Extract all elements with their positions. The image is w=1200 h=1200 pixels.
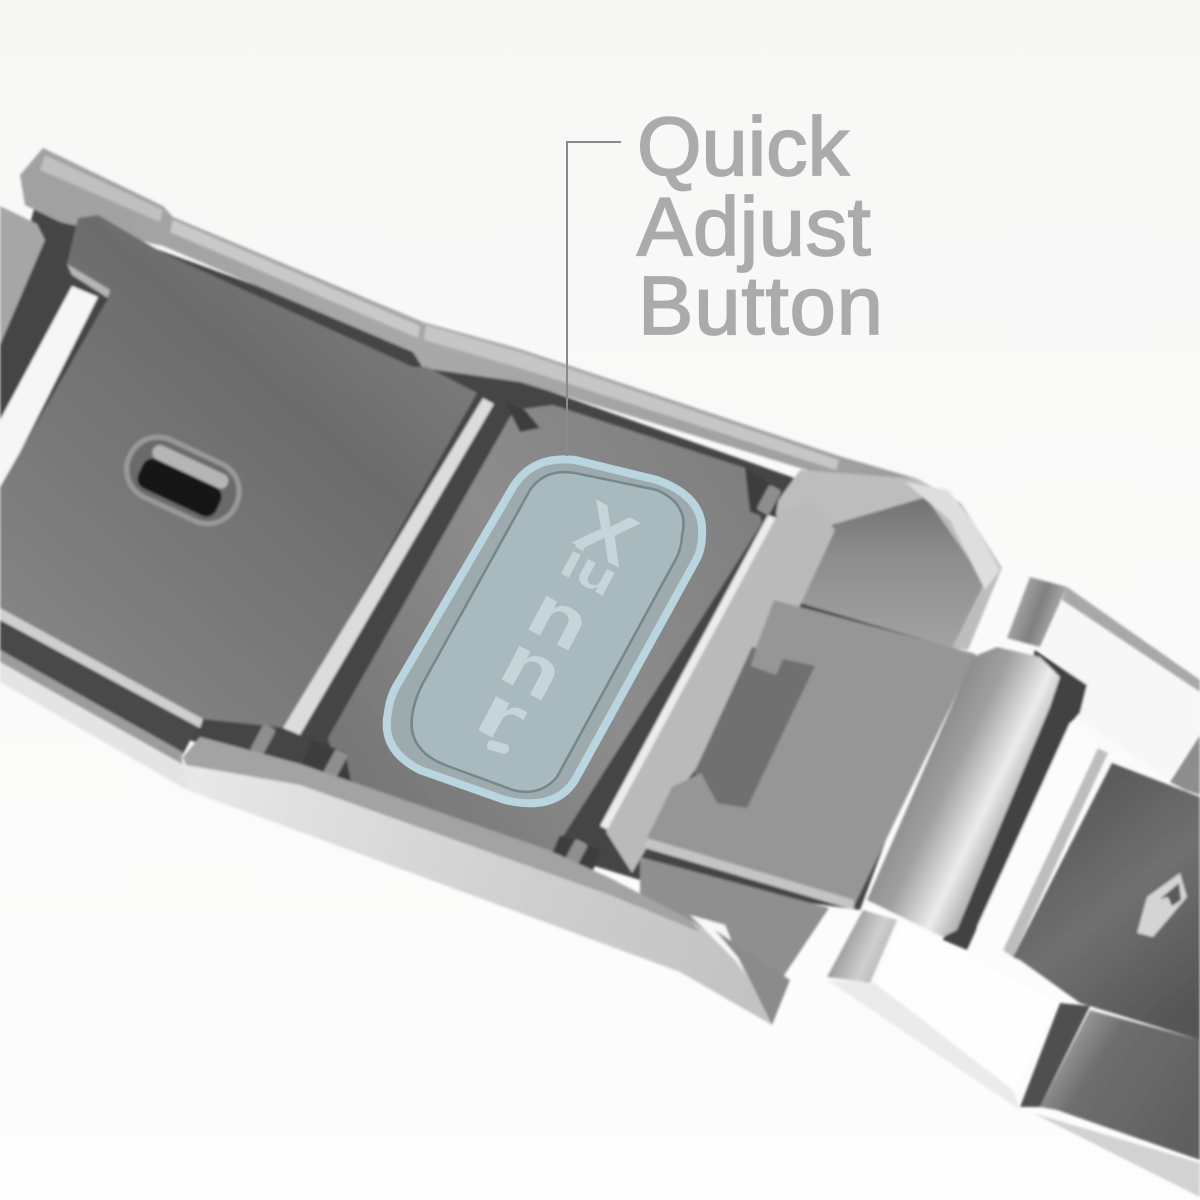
logo engraving: n (516, 568, 604, 667)
logo engraving: X (563, 486, 650, 582)
lower front shell (183, 737, 790, 1025)
left plate with slot (0, 215, 494, 735)
lower-left shell (0, 625, 200, 790)
icon: oval slot (113, 424, 253, 537)
logo engraving (464, 486, 650, 761)
callout label: Quick Adjust Button: Quick (637, 100, 850, 193)
logo engraving: iu (553, 533, 627, 607)
highlight: quick adjust button badge (387, 459, 702, 803)
upper shell bar (20, 148, 930, 492)
bottom light band (1033, 1113, 1200, 1197)
bracelet links (827, 577, 1200, 1197)
logo engraving: r (464, 669, 541, 761)
bottom dark link (1040, 1010, 1200, 1160)
icon: spring pins (250, 484, 782, 872)
right bevel of plate (600, 515, 782, 832)
dark link (1013, 763, 1200, 1040)
centre rounded link (867, 647, 1060, 937)
interior under tongue (640, 857, 829, 983)
open shell cavity and rim (770, 470, 1002, 650)
tongue plate with slot (645, 600, 976, 910)
middle plate (250, 402, 835, 880)
top block (1007, 577, 1200, 795)
roller bracket shadow (943, 650, 1087, 950)
small white link (977, 723, 1108, 957)
dark clasp interior (0, 205, 960, 910)
icon: arrow engraving (1137, 873, 1187, 937)
callout label: Quick Adjust Button: Button (638, 259, 884, 352)
logo engraving: n (489, 618, 577, 717)
bottom white link (827, 910, 1090, 1110)
left end link (0, 206, 98, 492)
callout: leader line (567, 142, 621, 456)
callout label: Quick Adjust Button: Adjust (637, 180, 871, 273)
